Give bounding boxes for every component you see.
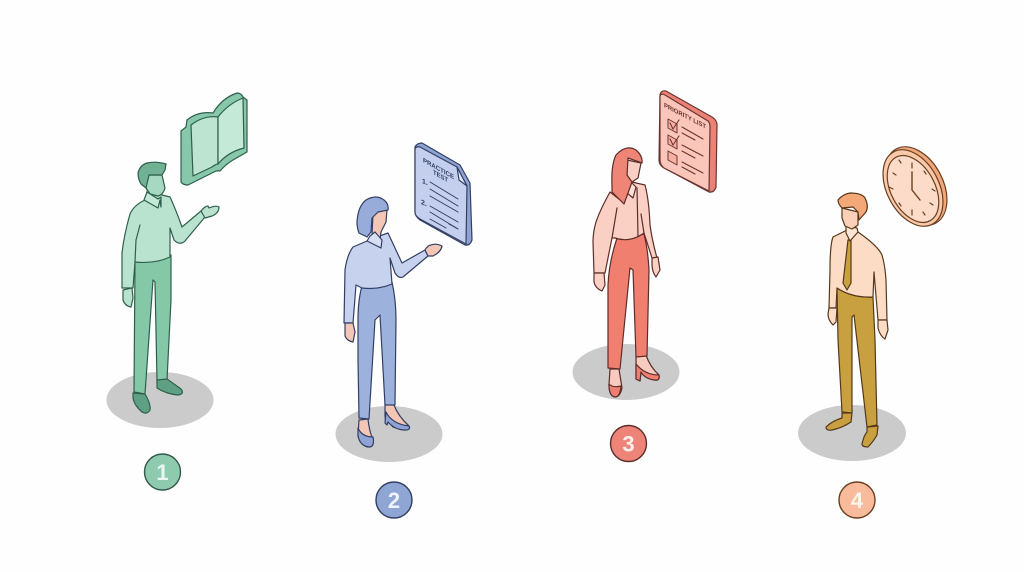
figure: man in shirt and tie [826,193,888,447]
icon: priority list [659,91,717,192]
badge 2: 2 [388,488,400,513]
document text: 2. [421,197,427,208]
document text: PRACTICE [423,157,454,181]
panel: step 1 green man with book [106,93,247,490]
icon: wall clock [871,136,960,236]
badge 4 [839,482,875,518]
badge 2 [376,482,412,518]
document text: TEST [433,169,449,185]
floor shadow 4 [798,405,906,461]
figure: man in green [122,162,219,413]
panel: step 2 blue woman with practice test [336,143,472,518]
floor shadow 2 [336,406,442,462]
icon: practice test document [415,143,472,245]
badge 1: 1 [156,460,169,485]
list heading: PRIORITY LIST [664,102,707,131]
document text: 1. [422,176,428,187]
badge 1 [144,454,180,490]
icon: open book [181,93,247,185]
badge 3: 3 [622,432,635,456]
panel: step 3 red woman with priority list [572,91,717,461]
document text [421,157,454,208]
badge 3 [610,426,646,462]
floor shadow 3 [572,344,680,400]
figure: woman in blue [344,197,442,447]
floor shadow 1 [106,372,214,428]
panel: step 4 man in tan with clock [798,136,960,518]
badge 4: 4 [851,488,864,513]
figure: woman in red [593,148,660,397]
